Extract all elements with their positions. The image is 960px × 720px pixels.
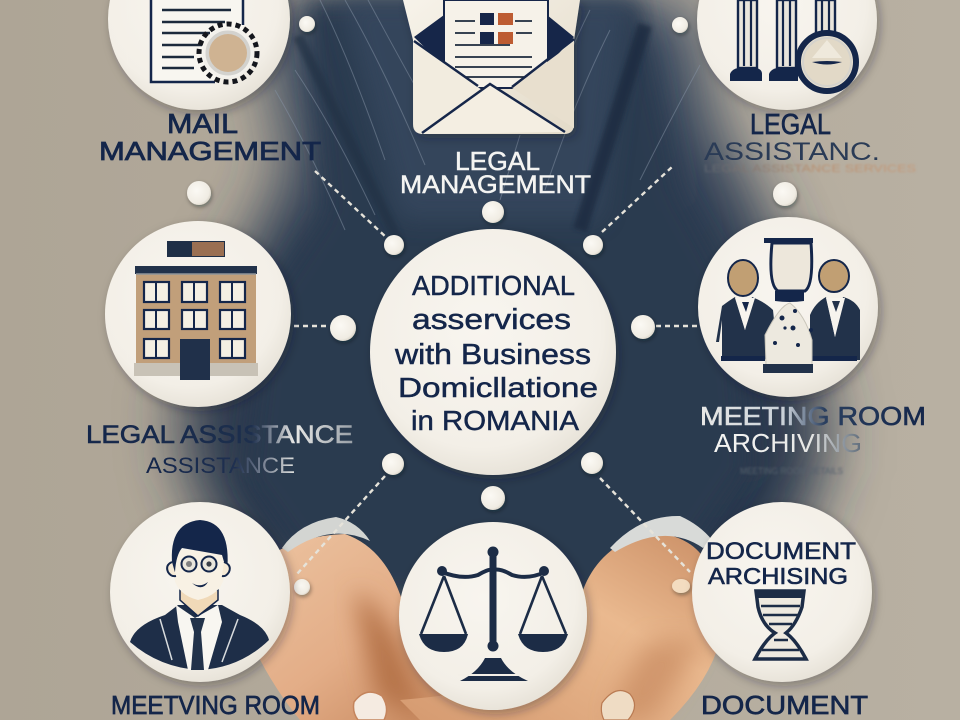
icon: office building [134,241,258,380]
panel: meeting room icon (middle right) [698,217,878,397]
heading: legal assistance top right: LEGAL [750,109,831,141]
left hand [260,517,443,720]
thumbnail right [601,691,635,720]
panel: scales icon (bottom centre) [399,522,587,710]
label inside disc: document archiving [708,542,856,584]
panel: envelope icon (top centre) [403,0,580,134]
icon: scales of justice [419,546,568,681]
icon: envelope and letter [414,0,574,134]
heading: meeting room archiving: MEETING ROOM DETAILS [740,466,843,476]
panel: person icon (bottom left) [110,502,290,682]
heading: meeting room bottom left: MEETVING ROOM [111,690,320,720]
heading: mail management: MAIL [167,108,238,139]
hands base between the cuffs [255,516,720,720]
panel: certificate icon (top left) [108,0,290,110]
title: additional services: with Business [394,339,591,371]
icon: man in suit with glasses [130,520,269,670]
connector lines [294,166,697,574]
title: additional services: Domicllatione [398,372,598,403]
title: additional services [394,270,598,436]
title: additional services: ADDITIONAL [412,270,575,301]
icon: document with seal [151,0,257,82]
icon: hourglass archive [755,590,806,659]
heading: document bottom right: DOCUMENT [701,690,868,720]
suit lapels and pinstripes [275,0,700,240]
heading: legal assistance top right: LEGAL ASSISTANCE SERVICES [704,163,916,175]
icon: courthouse columns with magnifier [730,0,856,91]
panel: building icon (middle left) [105,221,291,407]
right hand [400,516,720,720]
background [132,0,860,597]
heading: legal management [402,152,591,194]
heading: mail management [101,114,321,161]
heading: legal assistance top right: ASSISTANC. [704,138,880,166]
connector dots [187,16,797,595]
panel: document archiving disc (bottom right) [692,502,872,682]
label inside disc: document archiving: DOCUMENT [706,538,856,565]
panel: columns and magnifier icon (top right) [697,0,877,110]
heading: legal assistance middle left: LEGAL ASSISTANCE [86,421,353,449]
heading: meeting room archiving [702,406,924,475]
icon: two people and hourglass [716,238,860,373]
thumbnail left [354,692,387,720]
label inside disc: document archiving: ARCHISING [708,563,848,589]
heading: meeting room archiving: ARCHIVING [714,428,862,458]
heading: legal assistance middle left [88,425,352,473]
heading: legal assistance top right [704,109,916,175]
heading: mail management: MANAGEMENT [99,136,321,166]
heading: legal management: MANAGEMENT [400,171,591,199]
title: additional services: asservices [412,304,571,336]
heading: legal assistance middle left: ASSISTANCE [146,453,295,478]
heading: centre disc [370,229,616,475]
title: additional services: in ROMANIA [411,405,579,436]
heading: meeting room archiving: MEETING ROOM [700,401,926,431]
heading: legal management: LEGAL [455,146,540,176]
